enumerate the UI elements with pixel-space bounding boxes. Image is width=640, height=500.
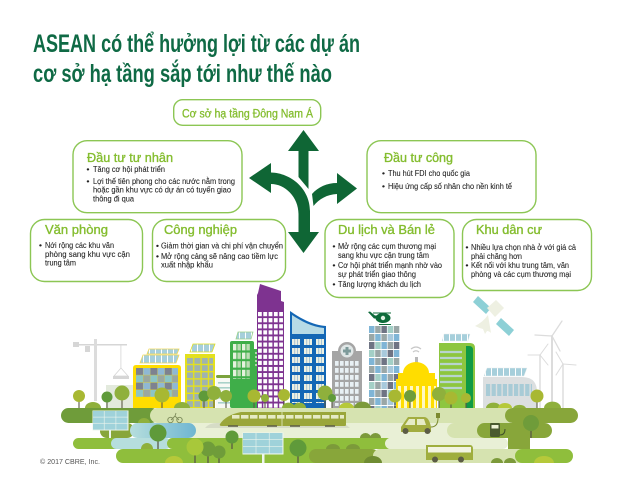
title: cơ sở hạ tầng sắp tới như thế nào	[33, 58, 332, 88]
icon: charging station	[490, 423, 505, 437]
panel: Đầu tư công	[367, 141, 536, 213]
illustration: crane	[73, 339, 129, 401]
panel: Khu dân cư	[462, 220, 592, 290]
panel: Du lịch và Bán lẻ: sang khu vực cận trung tâm	[338, 250, 429, 260]
panel: Văn phòng: Nới rộng các khu văn	[45, 240, 114, 250]
panel: Khu dân cư: Kết nối với khu trung tâm, văn	[471, 260, 569, 270]
icon: train	[205, 412, 350, 428]
panel: Công nghiệp: •	[156, 240, 159, 250]
panel: Văn phòng: Văn phòng	[45, 223, 108, 237]
illustration: buildings right	[439, 334, 537, 408]
illustration: hospital, tower, helicopter, capitol	[332, 312, 437, 408]
illustration: skyline trees	[73, 386, 561, 408]
panel: Đầu tư công: •	[382, 168, 385, 178]
panel: Công nghiệp: •	[156, 251, 159, 261]
panel: Đầu tư công: Đầu tư công	[384, 151, 453, 165]
panel: Du lịch và Bán lẻ: •	[332, 260, 336, 270]
copyright: © 2017 CBRE, Inc.	[40, 457, 100, 466]
panel: Khu dân cư: Khu dân cư	[476, 223, 542, 237]
panel: Đầu tư tư nhân: Tăng cơ hội phát triển	[93, 164, 165, 174]
panel: Cơ sở hạ tầng Đông Nam Á: Cơ sở hạ tầng Đông Nam Á	[182, 108, 313, 120]
panel: Khu dân cư: phải chăng hơn	[471, 251, 522, 261]
panel: Du lịch và Bán lẻ: Cơ hội phát triển mạnh nhờ vào	[338, 260, 442, 270]
panel: Văn phòng: trung tâm	[45, 258, 76, 268]
panel: Công nghiệp: Giảm thời gian và chi phí vận chuyển	[161, 240, 283, 250]
panel: Khu dân cư: Nhiều lựa chọn nhà ở với giá cả	[471, 242, 576, 252]
arrows: crossroads	[249, 130, 357, 253]
panel: Du lịch và Bán lẻ: Tăng lượng khách du lịch	[338, 279, 421, 289]
illustration: ground trees and bushes	[138, 415, 554, 463]
panel: Đầu tư công: Thu hút FDI cho quốc gia	[388, 168, 470, 178]
panel: Đầu tư công: Hiệu ứng cấp số nhân cho nền kinh tế	[388, 181, 512, 191]
panel: Công nghiệp: Công nghiệp	[164, 223, 237, 237]
panel: Du lịch và Bán lẻ: •	[332, 279, 336, 289]
panel: Đầu tư tư nhân: Lợi thế tiên phong cho các nước nằm trong	[93, 176, 235, 186]
illustration: buildings left	[106, 332, 266, 408]
panel: Đầu tư tư nhân	[73, 141, 242, 213]
panel: Công nghiệp	[152, 220, 286, 282]
panel: Du lịch và Bán lẻ: •	[332, 241, 336, 251]
panel: Du lịch và Bán lẻ: Du lịch và Bán lẻ	[338, 223, 435, 237]
panel: Đầu tư tư nhân: •	[86, 176, 90, 186]
panel: Đầu tư tư nhân: hoặc gần khu vực có dự án có tuyến giao	[93, 184, 231, 194]
panel: Đầu tư tư nhân: Đầu tư tư nhân	[87, 151, 173, 165]
panel: Cơ sở hạ tầng Đông Nam Á	[174, 100, 321, 125]
panel: Đầu tư tư nhân: •	[86, 164, 90, 174]
panel: Văn phòng	[30, 220, 142, 282]
icon: electric bus	[426, 445, 473, 462]
panel: Đầu tư công: •	[382, 181, 385, 191]
icon: cyclist	[168, 413, 182, 423]
panel: Công nghiệp: xuất nhập khẩu	[161, 260, 213, 270]
icon: satellite	[473, 296, 514, 336]
panel: Du lịch và Bán lẻ	[325, 220, 454, 298]
panel: Du lịch và Bán lẻ: Mở rộng các cụm thương mại	[338, 241, 436, 251]
illustration: solar panels on ground	[92, 410, 284, 463]
title	[33, 30, 360, 88]
panel: Công nghiệp: Mở rộng cảng sẽ nâng cao tiềm lực	[161, 251, 278, 261]
icon: wind turbines	[528, 321, 576, 408]
panel: Văn phòng: •	[39, 240, 42, 250]
title: ASEAN có thể hưởng lợi từ các dự án	[33, 30, 360, 58]
panel: Khu dân cư: •	[466, 260, 468, 270]
illustration: purple and blue towers	[257, 284, 326, 408]
panel: Văn phòng: phòng sang khu vực cận	[45, 249, 130, 259]
panel: Du lịch và Bán lẻ: sự phát triển giao thông	[338, 269, 416, 279]
illustration: ground bands	[61, 408, 578, 463]
panel: Khu dân cư: •	[466, 242, 468, 252]
panel: Khu dân cư: phòng và các cụm thương mại	[471, 269, 571, 279]
panel: Đầu tư tư nhân: thông đi qua	[93, 194, 134, 204]
icon: electric car	[401, 413, 440, 434]
